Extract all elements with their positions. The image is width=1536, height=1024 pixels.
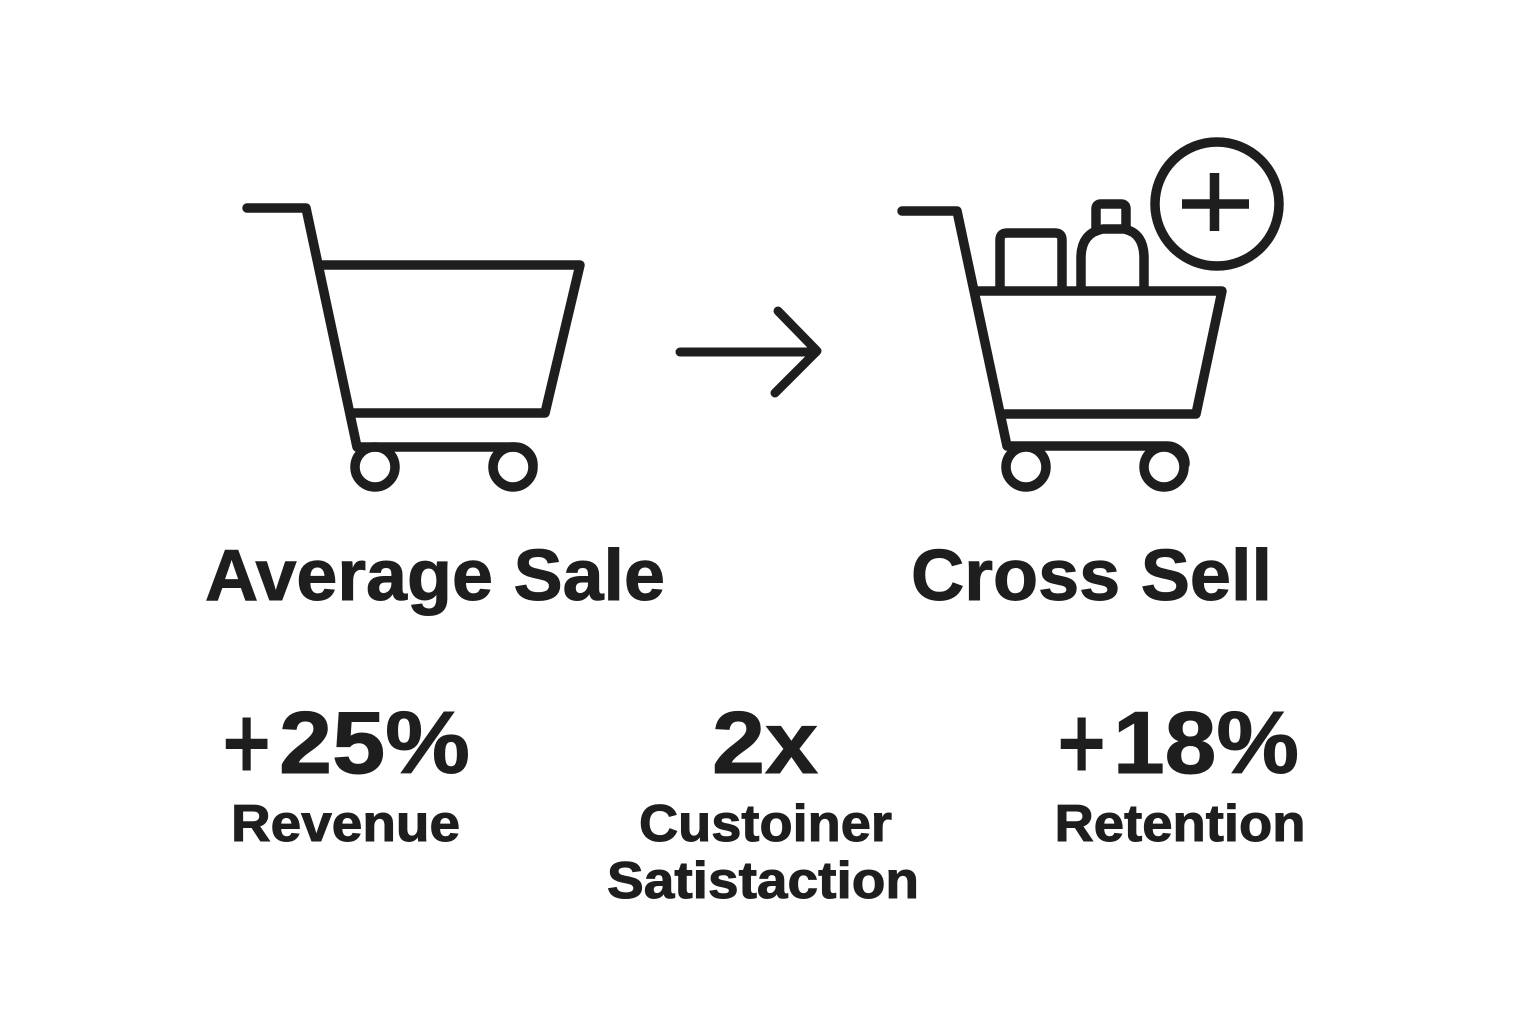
stat: customer satisfaction: 2x: [712, 693, 818, 792]
icon: bottle product: [1081, 204, 1144, 287]
icon: full shopping cart with plus badge: [902, 142, 1279, 487]
icon: box product: [1000, 233, 1062, 287]
stat: customer satisfaction: Custoiner: [639, 795, 892, 853]
icon: empty shopping cart: [247, 208, 580, 487]
arrow: average sale to cross sell: [680, 311, 817, 393]
stat: revenue: [223, 685, 470, 853]
stat: retention: 18%: [1113, 693, 1299, 792]
stat: revenue: 25%: [279, 693, 470, 792]
stat: retention: +: [1058, 685, 1105, 800]
stat: revenue: Revenue: [231, 795, 460, 853]
stat: retention: [1054, 685, 1306, 853]
icon: plus badge: [1155, 142, 1279, 266]
heading: Cross Sell: Cross Sell: [911, 536, 1272, 616]
stat: retention: Retention: [1054, 795, 1306, 853]
stat: revenue: +: [223, 685, 270, 800]
heading: Average Sale: Average Sale: [205, 536, 665, 616]
stat: customer satisfaction: [607, 693, 919, 910]
stat: customer satisfaction: Satistaction: [607, 852, 919, 910]
